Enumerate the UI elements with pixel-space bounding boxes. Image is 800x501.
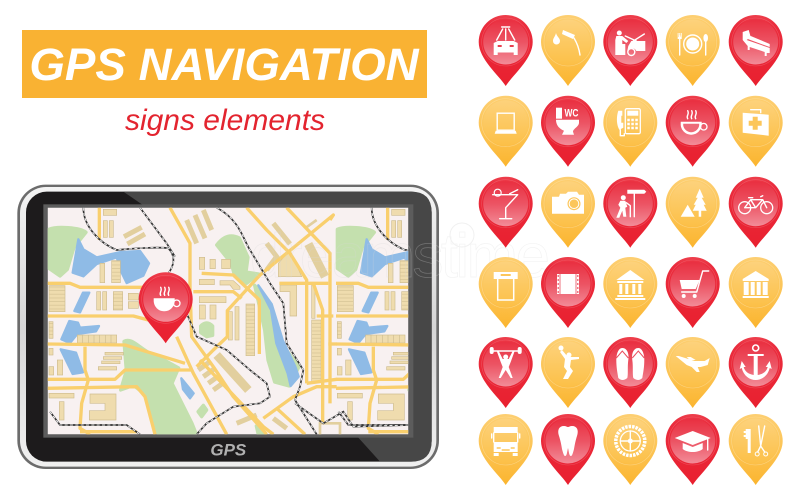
pin: bank xyxy=(603,257,657,328)
GPS device xyxy=(17,185,484,469)
pin: WC xyxy=(541,96,595,167)
pin: fuel xyxy=(541,15,595,86)
subtitle: signs elements xyxy=(125,104,325,137)
pin: discus thrower xyxy=(541,337,595,408)
pin: dining xyxy=(666,15,720,86)
pin: coffee xyxy=(666,96,720,167)
pin: weightlifter xyxy=(479,337,533,408)
pin: barber xyxy=(729,414,783,485)
pin: bicycle xyxy=(729,177,783,248)
pin: shopping cart xyxy=(666,257,720,328)
pin: telephone xyxy=(603,96,657,167)
pin: hiker xyxy=(603,177,657,248)
device screen bezel glare xyxy=(123,192,432,462)
pin: anchor xyxy=(729,337,783,408)
pin: first aid xyxy=(729,96,783,167)
pin: graduation cap xyxy=(666,414,720,485)
map xyxy=(48,208,408,434)
pin: bed xyxy=(729,15,783,86)
pin: tooth xyxy=(541,414,595,485)
blocks centre xyxy=(187,210,340,435)
pin: bus xyxy=(479,414,533,485)
pin: flip flops xyxy=(603,337,657,408)
pin: car wash xyxy=(479,15,533,86)
pin: film xyxy=(541,257,595,328)
pin: camping xyxy=(666,177,720,248)
pin: cocktail xyxy=(479,177,533,248)
pin: camera xyxy=(541,177,595,248)
device casing xyxy=(17,185,439,469)
right map tile xyxy=(336,208,408,434)
pin: plane xyxy=(666,337,720,408)
pin: museum xyxy=(729,257,783,328)
pin: WC: WC xyxy=(564,108,579,120)
map pin: coffee xyxy=(139,272,193,343)
watermark: dreamstime xyxy=(250,222,550,291)
roads centre xyxy=(170,208,337,434)
left map tile xyxy=(48,208,196,434)
lake and river xyxy=(181,285,299,398)
green parks xyxy=(198,236,299,433)
GPS label: GPS xyxy=(210,440,247,459)
title banner: GPS NAVIGATION xyxy=(29,39,420,90)
pin: laptop xyxy=(479,96,533,167)
pin: ATM xyxy=(479,257,533,328)
pin: roulette xyxy=(603,414,657,485)
pin: car repair xyxy=(603,15,657,86)
railway lines xyxy=(140,208,408,434)
